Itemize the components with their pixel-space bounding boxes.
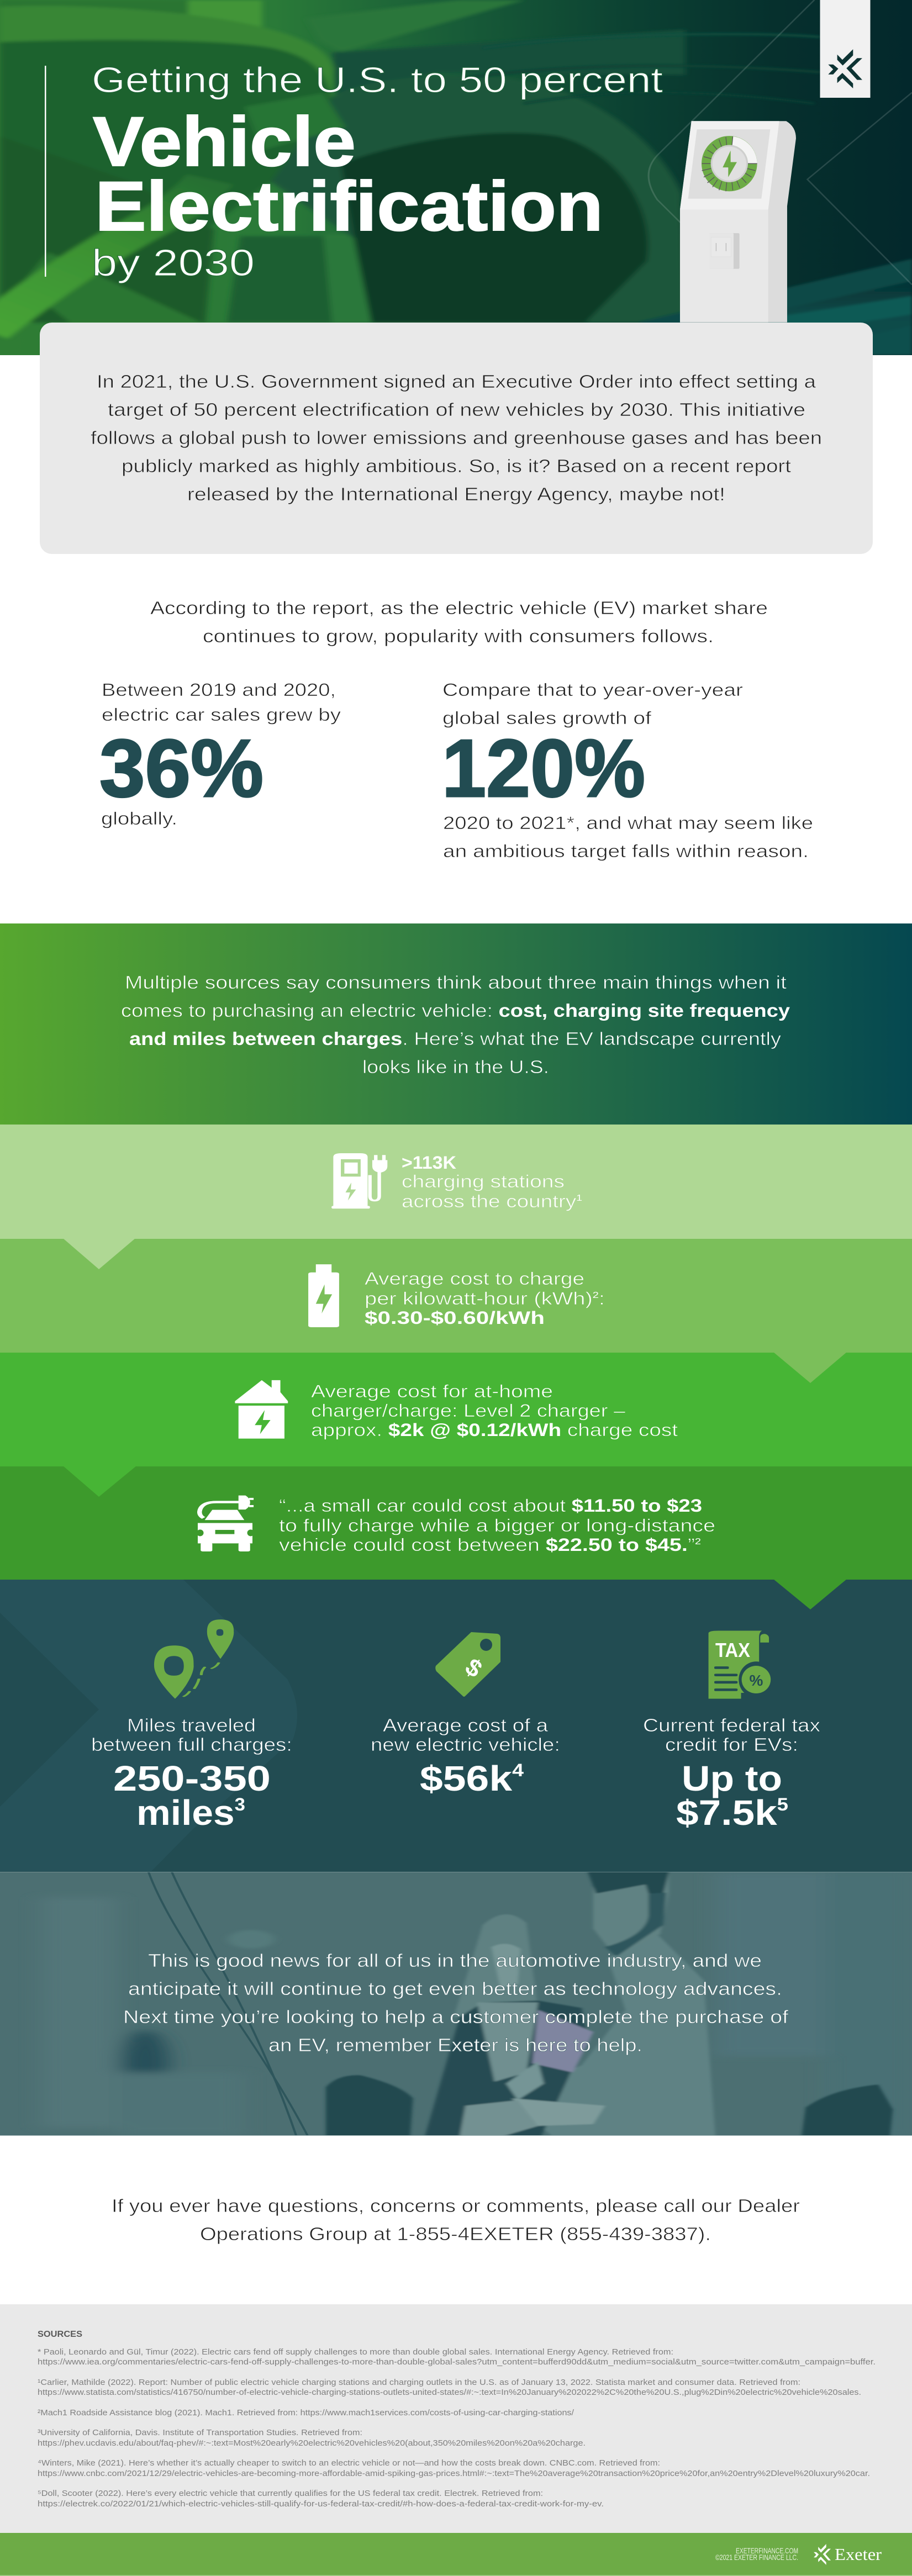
cost per kWh text: 2: [593, 1291, 599, 1300]
average cost value: $56k: [420, 1759, 498, 1798]
logo tab: [820, 0, 871, 98]
contact text: [112, 2195, 800, 2244]
tax credit value: [676, 1759, 788, 1833]
banner text: [121, 972, 790, 1077]
miles value: 3: [235, 1794, 245, 1814]
market share intro text: continues to grow, popularity with consumers follows.: [203, 626, 714, 646]
stat: 120 percent: 120%: [442, 723, 645, 814]
stat: 36 percent: [99, 680, 341, 828]
stat: 36 percent: 36%: [99, 723, 263, 814]
banner text: Multiple sources say consumers think about three main things when it: [125, 972, 787, 993]
stat: 36 percent: globally.: [101, 809, 177, 828]
tax credit text: Current federal tax: [643, 1715, 821, 1735]
stat: miles per charge: [91, 1619, 292, 1833]
sources list: https://www.statista.com/statistics/416750/number-of-electric-vehicle-charging-stations-outlets-united-states/#:~:text=In%20January%202022%2C%20the%20U.S.,plug%2Din%20electric%20vehicle%20sales.: [38, 2388, 861, 2397]
icon: map pins: [154, 1619, 234, 1699]
title: [92, 60, 663, 284]
icon: price tag: [435, 1632, 500, 1697]
charging stations text: [402, 1153, 582, 1211]
icon: price tag: $: [460, 1653, 487, 1683]
at-home charger text: Average cost for at-home: [311, 1381, 553, 1401]
stat: 120 percent: global sales growth of: [442, 708, 651, 728]
cost per kWh text: Average cost to charge: [365, 1269, 584, 1289]
at-home charger text: approx. $2k @ $0.12/kWh charge cost: [311, 1420, 678, 1440]
intro paragraph: target of 50 percent electrification of new vehicles by 2030. This initiative: [108, 399, 805, 420]
charging stations text: 1: [576, 1194, 582, 1203]
contact text: Operations Group at 1-855-4EXETER (855-439-3837).: [200, 2224, 711, 2244]
closing message text: This is good news for all of us in the automotive industry, and we: [148, 1950, 762, 1971]
full charge cost text: 2: [695, 1537, 701, 1546]
arrow: pointer down left: [63, 1466, 136, 1497]
cost per kWh text: per kilowatt-hour (kWh): [365, 1289, 547, 1308]
panel: intro card: [40, 323, 873, 554]
panel: cost per kWh band: [0, 1238, 912, 1353]
charging stations text: charging stations: [402, 1171, 565, 1191]
panel: hero banner: [0, 0, 912, 355]
title: Vehicle: [93, 102, 356, 181]
tax credit value: Up to: [682, 1759, 782, 1798]
miles text: Miles traveled: [127, 1715, 256, 1735]
panel: footer: [0, 2533, 912, 2576]
icon: tax document: TAX: [715, 1639, 750, 1661]
panel: full charge cost band: [0, 1466, 912, 1580]
tax credit value: $7.5k: [676, 1793, 765, 1833]
banner text: comes to purchasing an electric vehicle: cost, charging site frequency: [121, 1000, 790, 1021]
market share intro text: [150, 598, 768, 646]
icon: house: [235, 1380, 288, 1439]
average cost text: new electric vehicle:: [371, 1734, 560, 1755]
charging stations text: across the country: [402, 1191, 546, 1211]
stat: 120 percent: an ambitious target falls within reason.: [443, 841, 809, 861]
miles value: 250-350: [113, 1759, 271, 1798]
decorative title rule: [45, 66, 46, 277]
miles value: miles: [136, 1793, 227, 1833]
stat: 36 percent: electric car sales grew by: [102, 705, 341, 725]
full charge cost text: “...a small car could cost about $11.50 to $23: [279, 1496, 702, 1516]
sources list: https://electrek.co/2022/01/21/which-electric-vehicles-still-qualify-for-us-federal-tax-credit/#h-how-does-a-federal-tax-credit-work-for-my-ev.: [38, 2499, 604, 2509]
icon: tax document: [709, 1630, 773, 1699]
market share intro text: According to the report, as the electric vehicle (EV) market share: [150, 598, 768, 618]
icon: charging pump: [331, 1153, 387, 1208]
sources list: ⁵Doll, Scooter (2022). Here’s every electric vehicle that currently qualifies for the US federal tax credit. Electrek. Retrieved from:: [38, 2489, 543, 2498]
title: Getting the U.S. to 50 percent: [92, 60, 663, 100]
intro paragraph: [91, 371, 822, 504]
stat: federal tax credit: [643, 1630, 821, 1833]
average cost text: [371, 1715, 560, 1755]
stat: 120 percent: [442, 680, 813, 861]
banner text: and miles between charges . Here’s what the EV landscape currently: [129, 1028, 782, 1049]
sources list: ¹Carlier, Mathilde (2022). Report: Number of public electric vehicle charging stations and charging outlets in the U.S. as of January 13, 2022. Statista market and consumer data. Retrieved from:: [38, 2378, 800, 2387]
arrow: pointer down left: [63, 1238, 135, 1269]
arrow: pointer down right: [773, 1352, 847, 1383]
footer copyright: EXETERFINANCE.COM: [736, 2546, 798, 2555]
panel: dealership photo closing message: [0, 1870, 912, 2137]
sources list: [38, 2347, 876, 2509]
photo: blurred dealership scene: [119, 1872, 895, 2135]
title: Electrification: [95, 167, 603, 245]
full charge cost text: [279, 1496, 715, 1555]
intro paragraph: released by the International Energy Agency, maybe not!: [187, 484, 725, 504]
sources list: https://phev.ucdavis.edu/about/faq-phev/#:~:text=Most%20early%20electric%20vehicles%20(about,350%20miles%20on%20a%20charge.: [38, 2438, 586, 2448]
charging stations text: >113K: [402, 1153, 456, 1173]
stat: 36 percent: Between 2019 and 2020,: [102, 680, 336, 700]
sources list: https://www.cnbc.com/2021/12/29/electric-vehicles-are-becoming-more-affordable-amid-spiking-gas-prices.html#:~:text=The%20average%20transaction%20price%20for,an%20entry%2Dlevel%20luxury%20car.: [38, 2469, 870, 2478]
footer logo: Exeter: [835, 2545, 882, 2564]
contact text: If you ever have questions, concerns or comments, please call our Dealer: [112, 2195, 800, 2216]
tax credit text: credit for EVs:: [665, 1734, 798, 1755]
sources heading: SOURCES: [38, 2330, 82, 2339]
closing message text: Next time you’re looking to help a customer complete the purchase of: [123, 2007, 789, 2027]
closing message text: anticipate it will continue to get even better as technology advances.: [128, 1978, 782, 1999]
tax credit text: [643, 1715, 821, 1755]
panel: sources: [0, 2304, 912, 2533]
sources list: * Paoli, Leonardo and Gül, Timur (2022). Electric cars fend off supply challenges to more than double global sales. International Energy Agency. Retrieved from:: [38, 2347, 673, 2357]
full charge cost text: to fully charge while a bigger or long-distance: [279, 1516, 715, 1535]
miles value: [113, 1759, 271, 1833]
panel: at-home charger band: [0, 1352, 912, 1466]
icon: car with plug: [197, 1496, 254, 1551]
arrow: pointer down right into stats: [773, 1579, 847, 1609]
tax credit value: 5: [777, 1794, 788, 1814]
intro paragraph: In 2021, the U.S. Government signed an Executive Order into effect setting a: [97, 371, 816, 392]
panel: consumer priorities gradient banner: [0, 923, 912, 1125]
sources list: https://www.iea.org/commentaries/electric-cars-fend-off-supply-challenges-to-more-than-double-global-sales?utm_content=bufferd90dd&utm_medium=social&utm_source=twitter.com&utm_campaign=buffer.: [38, 2357, 876, 2367]
closing message text: [123, 1950, 789, 2055]
miles text: [91, 1715, 292, 1755]
cost per kWh text: [365, 1269, 605, 1328]
at-home charger text: [311, 1381, 678, 1440]
average cost value: 4: [512, 1760, 524, 1780]
closing message text: an EV, remember Exeter is here to help.: [268, 2035, 642, 2055]
footer copyright: ©2021 EXETER FINANCE LLC.: [715, 2553, 798, 2562]
full charge cost text: vehicle could cost between $22.50 to $45. ”: [279, 1535, 694, 1555]
stat: 120 percent: 2020 to 2021*, and what may seem like: [443, 813, 813, 833]
stat: average EV cost: [371, 1632, 560, 1798]
footer copyright: [715, 2546, 798, 2562]
sources list: ²Mach1 Roadside Assistance blog (2021). Mach1. Retrieved from: https://www.mach1services.com/costs-of-using-car-charging-stations/: [38, 2408, 574, 2417]
sources list: ³University of California, Davis. Institute of Transportation Studies. Retrieved from:: [38, 2428, 362, 2437]
cost per kWh text: :: [599, 1289, 605, 1308]
sources list: ⁴Winters, Mike (2021). Here’s whether it’s actually cheaper to switch to an electric vehicle or not—and how the costs break down. CNBC.com. Retrieved from:: [38, 2458, 660, 2468]
footer logo: [814, 2544, 882, 2565]
banner text: looks like in the U.S.: [362, 1057, 549, 1077]
stat: 120 percent: Compare that to year-over-year: [442, 680, 743, 700]
title: by 2030: [92, 242, 255, 284]
icon: charging station: [680, 121, 796, 323]
panel: dark stats background: [0, 1579, 912, 1872]
intro paragraph: follows a global push to lower emissions and greenhouse gases and has been: [91, 427, 822, 448]
at-home charger text: charger/charge: Level 2 charger –: [311, 1401, 625, 1421]
icon: battery: [308, 1264, 339, 1327]
panel: charging stations band: [0, 1125, 912, 1239]
miles text: between full charges:: [91, 1734, 292, 1755]
average cost text: Average cost of a: [383, 1715, 549, 1735]
cost per kWh text: $0.30-$0.60/kWh: [365, 1308, 545, 1328]
icon: tax document: %: [750, 1672, 763, 1689]
intro paragraph: publicly marked as highly ambitious. So, is it? Based on a recent report: [122, 456, 791, 476]
